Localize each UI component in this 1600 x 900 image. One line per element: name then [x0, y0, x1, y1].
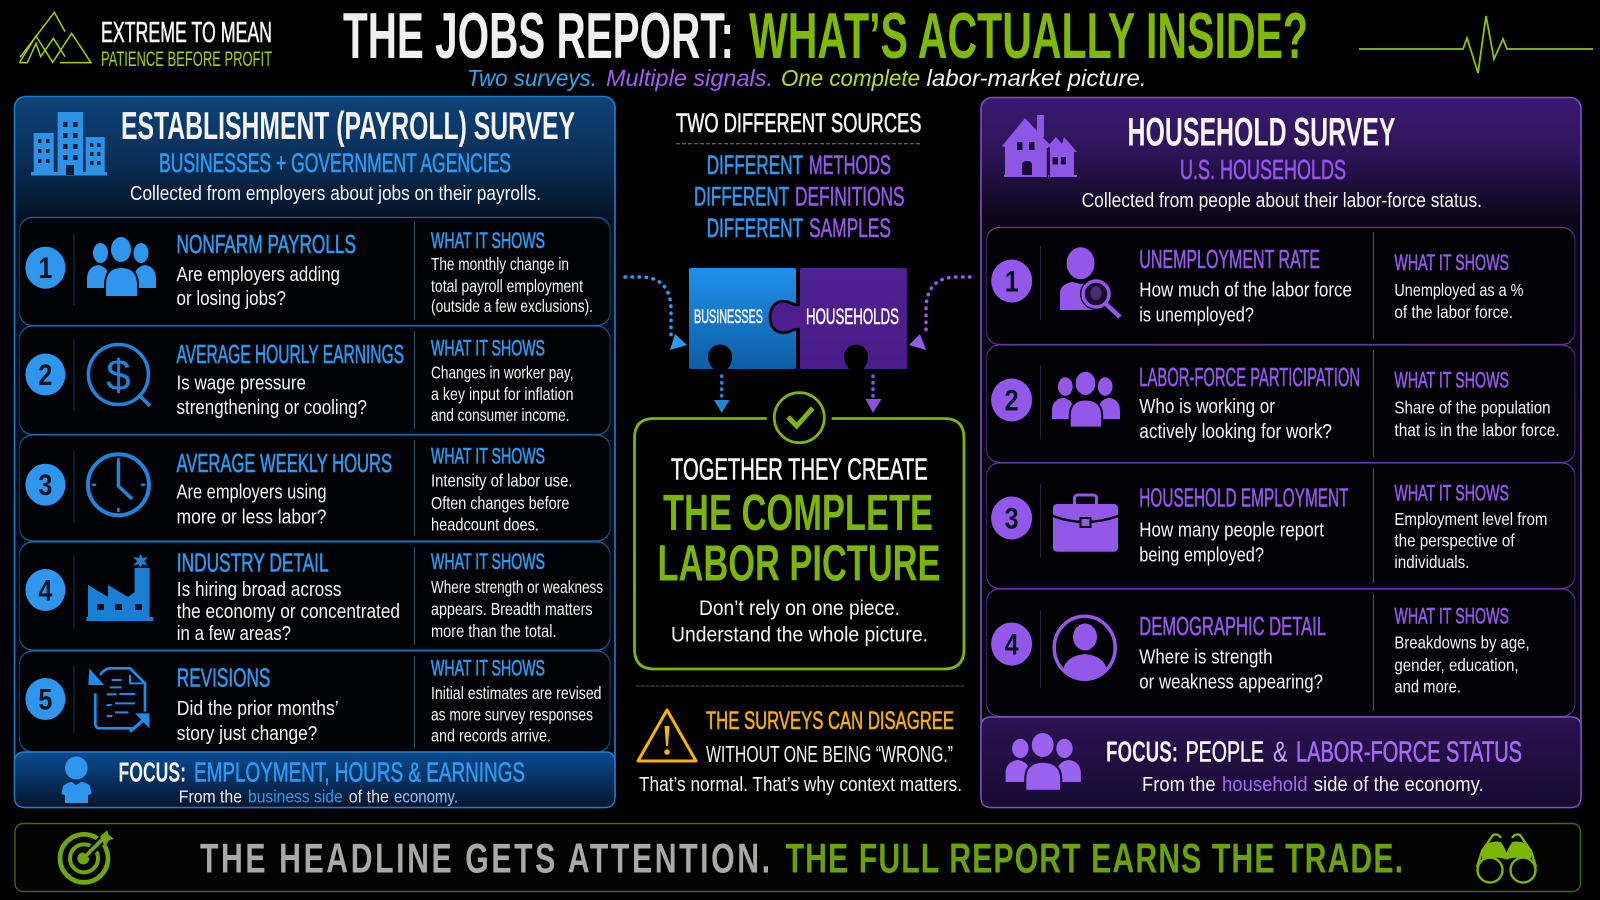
focus note — [1142, 774, 1484, 796]
row: labor-force participation — [986, 345, 1575, 462]
row question: Did the prior months’ — [177, 698, 339, 720]
arrow: household to puzzle — [909, 277, 970, 350]
different samples: DIFFERENT — [707, 213, 803, 243]
icon: person with magnifier — [1060, 247, 1120, 317]
callout text: Understand the whole picture. — [671, 623, 928, 647]
panel subheading: U.S. HOUSEHOLDS — [1180, 154, 1346, 185]
bottom banner — [15, 824, 1580, 892]
subtitle: Two surveys. — [467, 65, 597, 91]
what it shows: WHAT IT SHOWS — [1394, 603, 1509, 628]
what it shows: that is in the labor force. — [1394, 420, 1560, 440]
what it shows: appears. Breadth matters — [431, 599, 593, 619]
panel description: Collected from people about their labor-force status. — [1082, 190, 1482, 212]
row heading: AVERAGE HOURLY EARNINGS — [176, 339, 404, 369]
what it shows: Share of the population — [1394, 397, 1551, 417]
row heading: AVERAGE WEEKLY HOURS — [176, 448, 392, 478]
number badge 4 — [991, 622, 1032, 666]
what it shows — [431, 549, 603, 641]
panel subheading: BUSINESSES + GOVERNMENT AGENCIES — [159, 148, 511, 178]
different methods: DIFFERENT — [707, 150, 803, 180]
row: unemployment rate — [986, 228, 1575, 344]
icon: binoculars — [1477, 834, 1536, 882]
what it shows: (outside a few exclusions). — [431, 296, 593, 316]
row heading: LABOR-FORCE PARTICIPATION — [1139, 362, 1360, 392]
different definitions: DIFFERENT — [694, 182, 789, 212]
what it shows: Often changes before — [431, 493, 569, 513]
icon: office buildings — [31, 112, 107, 176]
puzzle pieces — [689, 268, 907, 370]
warning note — [638, 707, 962, 796]
warning heading: THE SURVEYS CAN DISAGREE — [706, 707, 954, 735]
row question — [177, 579, 400, 645]
what it shows: headcount does. — [431, 514, 539, 534]
callout text: Don’t rely on one piece. — [699, 596, 900, 620]
number badge 3: 3 — [38, 469, 52, 502]
heading: TWO DIFFERENT SOURCES — [676, 108, 921, 138]
callout text — [671, 596, 928, 647]
warning text: That’s normal. That’s why context matters. — [639, 774, 962, 796]
row question — [1139, 646, 1323, 693]
what it shows — [1394, 481, 1547, 572]
focus heading: PEOPLE — [1186, 737, 1264, 769]
what it shows — [1394, 367, 1560, 440]
number badge 4: 4 — [1005, 628, 1019, 662]
panel: household survey — [981, 98, 1581, 808]
row question: Are employers using — [176, 482, 326, 504]
what it shows: a key input for inflation — [431, 384, 574, 404]
row question — [176, 372, 367, 419]
subtitle: One complete — [781, 65, 920, 91]
title: THE JOBS REPORT: — [343, 0, 734, 72]
panel: establishment survey — [14, 96, 615, 808]
panel heading: ESTABLISHMENT (PAYROLL) SURVEY — [121, 105, 575, 148]
number badge 4: 4 — [38, 574, 53, 608]
row heading: INDUSTRY DETAIL — [177, 548, 329, 578]
row question: the economy or concentrated — [177, 601, 400, 623]
row question: How many people report — [1139, 520, 1324, 542]
what it shows — [431, 336, 574, 425]
banner message: THE HEADLINE GETS ATTENTION. — [200, 835, 770, 882]
what it shows: The monthly change in — [431, 254, 569, 274]
number badge 3 — [25, 464, 65, 506]
puzzle label businesses: BUSINESSES — [694, 306, 763, 328]
focus banner: people — [981, 717, 1581, 808]
number badge 4 — [25, 569, 65, 611]
callout heading: TOGETHER THEY CREATE — [671, 452, 928, 486]
what it shows: WHAT IT SHOWS — [431, 656, 545, 681]
logo — [19, 12, 272, 71]
what it shows: and records arrive. — [431, 726, 551, 746]
row question: or weakness appearing? — [1139, 671, 1323, 693]
what it shows — [1394, 603, 1530, 697]
row question — [1139, 396, 1332, 443]
focus heading — [1106, 737, 1522, 769]
heartbeat line — [1359, 16, 1593, 73]
row: average hourly earnings — [20, 326, 610, 434]
what it shows — [431, 656, 602, 746]
what it shows: WHAT IT SHOWS — [431, 336, 545, 360]
row heading: REVISIONS — [177, 663, 270, 693]
number badge 2 — [25, 354, 65, 396]
icon: revised document — [88, 668, 149, 732]
what it shows: and consumer income. — [431, 405, 570, 425]
icon: mountains — [19, 12, 91, 63]
row question: actively looking for work? — [1139, 421, 1332, 443]
focus heading: EMPLOYMENT, HOURS & EARNINGS — [194, 757, 525, 788]
banner message: THE FULL REPORT EARNS THE TRADE. — [786, 835, 1403, 882]
what it shows: WHAT IT SHOWS — [1394, 481, 1509, 506]
row heading: UNEMPLOYMENT RATE — [1139, 244, 1320, 274]
icon: person in circle — [1054, 616, 1115, 679]
different definitions: DEFINITIONS — [795, 182, 905, 212]
icon: people — [87, 237, 156, 297]
row question: or losing jobs? — [176, 288, 286, 310]
callout title — [658, 484, 940, 592]
row: average weekly hours — [20, 435, 610, 541]
number badge 2 — [991, 378, 1032, 422]
panel description: Collected from employers about jobs on their payrolls. — [130, 183, 541, 205]
row: household employment — [986, 463, 1575, 588]
focus heading: FOCUS: — [118, 757, 186, 788]
row heading: DEMOGRAPHIC DETAIL — [1139, 611, 1326, 641]
focus note: economy. — [394, 787, 458, 807]
panel heading: HOUSEHOLD SURVEY — [1128, 111, 1396, 155]
row question: How much of the labor force — [1139, 280, 1352, 302]
row: revisions — [20, 651, 610, 752]
what it shows: WHAT IT SHOWS — [431, 549, 545, 574]
row question: Where is strength — [1139, 646, 1273, 668]
row question: in a few areas? — [177, 623, 291, 645]
brand name: EXTREME TO MEAN — [101, 17, 272, 49]
focus note: of the — [349, 787, 389, 807]
icon: target with arrow — [60, 830, 114, 882]
panel: center sources — [676, 108, 922, 243]
focus note: From the — [1142, 774, 1216, 796]
what it shows: the perspective of — [1394, 531, 1515, 551]
puzzle label households: HOUSEHOLDS — [806, 304, 899, 329]
icon: check — [774, 393, 824, 443]
what it shows: WHAT IT SHOWS — [1394, 367, 1509, 392]
icon: dollar in circle: $ — [106, 351, 131, 400]
number badge 5 — [25, 678, 65, 720]
number badge 5: 5 — [38, 684, 52, 716]
number badge 1: 1 — [1005, 266, 1019, 298]
row question: Who is working or — [1139, 396, 1275, 418]
warning subheading: WITHOUT ONE BEING “WRONG.” — [706, 741, 953, 767]
icon: factory — [86, 554, 153, 621]
different methods: METHODS — [809, 150, 891, 180]
what it shows — [431, 444, 572, 534]
different samples: SAMPLES — [809, 213, 891, 243]
number badge 1 — [25, 247, 65, 289]
what it shows: Breakdowns by age, — [1394, 632, 1530, 652]
row: demographic detail — [986, 589, 1575, 716]
row: industry detail — [20, 542, 610, 650]
banner message — [200, 835, 1403, 882]
row question: Is hiring broad across — [177, 579, 342, 601]
arrow: household down — [866, 376, 882, 413]
icon: people — [1052, 372, 1120, 428]
arrow: business to puzzle — [625, 277, 687, 350]
what it shows — [431, 228, 593, 316]
focus note: business side — [248, 787, 343, 807]
row heading: NONFARM PAYROLLS — [176, 229, 356, 259]
row question: Is wage pressure — [176, 372, 306, 394]
row question — [176, 482, 326, 528]
number badge 3 — [991, 496, 1032, 540]
title — [343, 0, 1308, 72]
row question: more or less labor? — [176, 506, 326, 528]
number badge 3: 3 — [1005, 502, 1019, 536]
brand tagline: PATIENCE BEFORE PROFIT — [101, 48, 272, 71]
row question: Are employers adding — [176, 264, 340, 286]
what it shows: WHAT IT SHOWS — [1394, 250, 1509, 275]
what it shows: Initial estimates are revised — [431, 683, 602, 703]
row question — [176, 264, 340, 310]
what it shows: Unemployed as a % — [1394, 280, 1524, 300]
what it shows: individuals. — [1394, 552, 1470, 572]
what it shows: of the labor force. — [1394, 302, 1513, 322]
what it shows: Intensity of labor use. — [431, 471, 572, 491]
what it shows: Changes in worker pay, — [431, 362, 574, 382]
what it shows: Where strength or weakness — [431, 577, 603, 597]
callout title: THE COMPLETE — [663, 484, 933, 541]
focus note: side of the economy. — [1314, 774, 1484, 796]
row question — [1139, 520, 1324, 567]
icon: dollar in circle — [88, 344, 150, 406]
focus banner: employment — [14, 752, 615, 808]
icon: person — [62, 756, 92, 803]
row question: being employed? — [1139, 545, 1264, 567]
focus heading: & — [1273, 737, 1288, 769]
number badge 1: 1 — [38, 252, 52, 285]
focus note — [179, 787, 458, 807]
focus note: From the — [179, 787, 242, 807]
row question — [177, 698, 339, 745]
row heading: HOUSEHOLD EMPLOYMENT — [1139, 483, 1349, 513]
number badge 1 — [991, 260, 1032, 302]
what it shows — [1394, 250, 1524, 322]
what it shows: WHAT IT SHOWS — [431, 444, 545, 468]
focus heading: FOCUS: — [1106, 737, 1178, 769]
row question — [1139, 280, 1352, 327]
number badge 2: 2 — [1005, 384, 1019, 418]
icon: people — [1006, 733, 1081, 791]
what it shows: WHAT IT SHOWS — [431, 228, 545, 253]
what it shows: as more survey responses — [431, 705, 593, 725]
icon: warning triangle — [638, 710, 696, 761]
icon: houses — [1002, 115, 1077, 177]
row question: is unemployed? — [1139, 305, 1254, 327]
focus note: household — [1222, 774, 1308, 796]
subtitle — [467, 65, 1146, 91]
subtitle: labor-market picture. — [926, 65, 1146, 91]
callout title: LABOR PICTURE — [658, 535, 940, 592]
focus heading — [118, 757, 525, 788]
row question: story just change? — [177, 723, 317, 745]
what it shows: total payroll employment — [431, 276, 583, 296]
row: nonfarm payrolls — [20, 218, 610, 326]
row question: strengthening or cooling? — [176, 397, 367, 419]
icon: clock — [88, 454, 149, 515]
what it shows: gender, education, — [1394, 655, 1519, 675]
arrow: business down — [714, 376, 730, 413]
icon: briefcase — [1053, 495, 1118, 552]
what it shows: more than the total. — [431, 621, 556, 641]
what it shows: Employment level from — [1394, 509, 1547, 529]
number badge 2: 2 — [38, 359, 52, 392]
subtitle: Multiple signals. — [606, 65, 773, 91]
panel: complete picture callout — [634, 393, 964, 669]
what it shows: and more. — [1394, 677, 1461, 697]
